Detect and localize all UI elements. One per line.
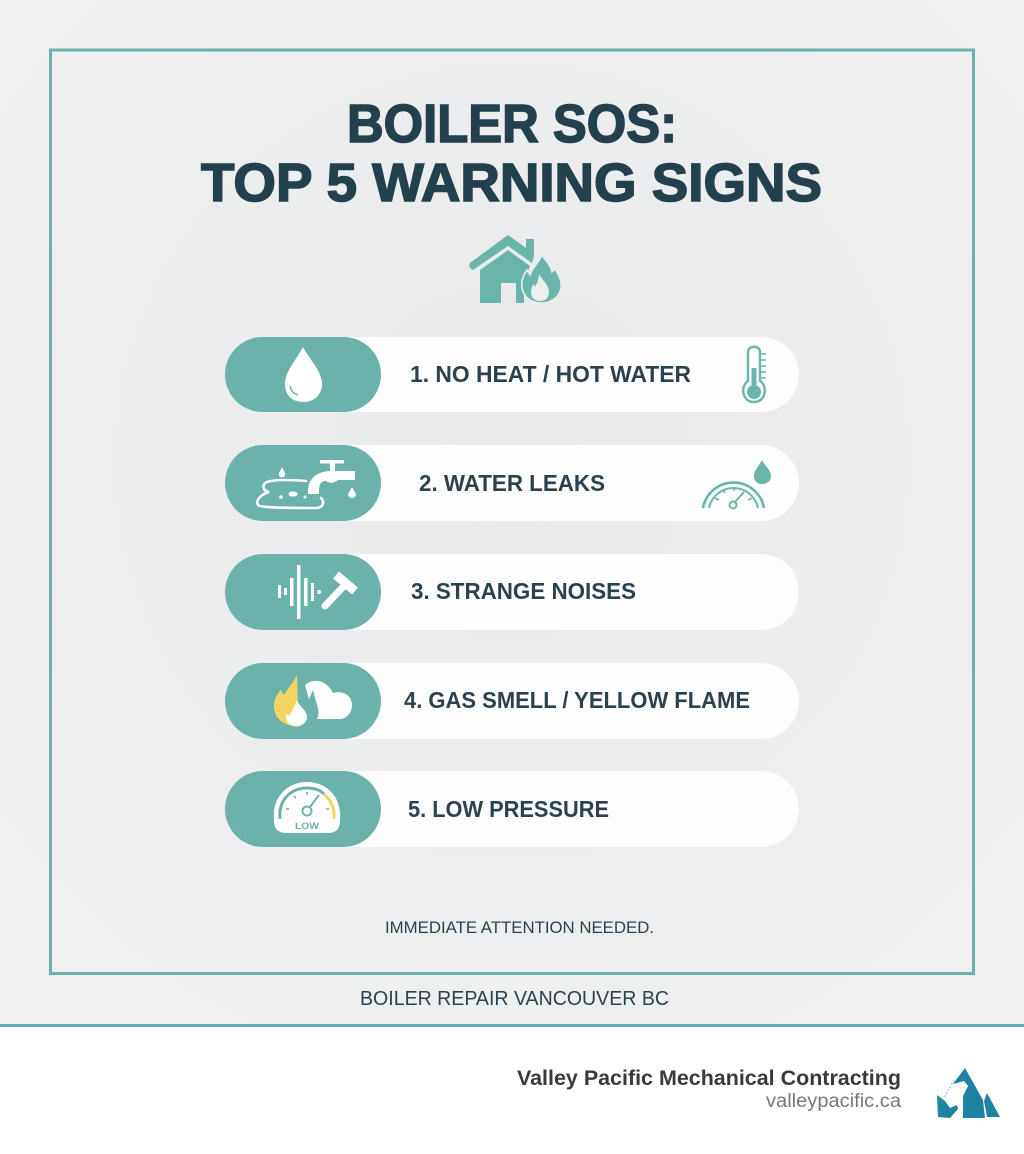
pill background	[225, 337, 799, 412]
item 2: water leaks	[225, 445, 799, 521]
icon: thermometer	[743, 347, 766, 402]
icon: sound wave and hammer	[278, 565, 355, 619]
icon: low pressure gauge	[274, 782, 340, 833]
icon: low pressure gauge: LOW	[295, 821, 319, 832]
label: 5. LOW PRESSURE	[408, 796, 609, 822]
footer divider line	[0, 1024, 1024, 1027]
icon: house with flame	[469, 235, 561, 303]
item 4: gas smell / yellow flame	[225, 663, 799, 739]
teal icon tab	[225, 771, 381, 847]
title: BOILER SOS:	[347, 94, 677, 154]
pill background	[225, 554, 799, 630]
title	[201, 94, 822, 213]
footer band	[0, 1026, 1024, 1154]
teal icon tab	[225, 663, 381, 739]
teal icon tab	[225, 445, 381, 521]
pill background	[225, 445, 799, 521]
icon: flame and gas cloud	[274, 675, 352, 727]
teal icon tab	[225, 554, 381, 630]
label: 3. STRANGE NOISES	[411, 578, 636, 604]
label: 2. WATER LEAKS	[419, 470, 605, 496]
pill background	[225, 663, 799, 739]
teal frame	[50, 50, 974, 974]
teal icon tab	[225, 337, 381, 412]
company website: valleypacific.ca	[766, 1091, 901, 1112]
icon: gauge with drop	[703, 460, 771, 508]
item 5: low pressure	[225, 771, 799, 847]
logo: mountains	[937, 1068, 1000, 1118]
icon: dripping tap and puddle	[257, 460, 356, 508]
item 3: strange noises	[225, 554, 799, 630]
subtitle: boiler repair: BOILER REPAIR VANCOUVER BC	[360, 988, 669, 1010]
title: TOP 5 WARNING SIGNS	[201, 153, 822, 213]
label: 4. GAS SMELL / YELLOW FLAME	[404, 687, 750, 713]
pill background	[225, 771, 799, 847]
company name: Valley Pacific Mechanical Contracting	[517, 1066, 901, 1090]
item 1: no heat / hot water	[225, 337, 799, 412]
label: 1. NO HEAT / HOT WATER	[410, 361, 691, 387]
icon: water drop	[285, 347, 322, 402]
caption: IMMEDIATE ATTENTION NEEDED.	[385, 918, 654, 937]
